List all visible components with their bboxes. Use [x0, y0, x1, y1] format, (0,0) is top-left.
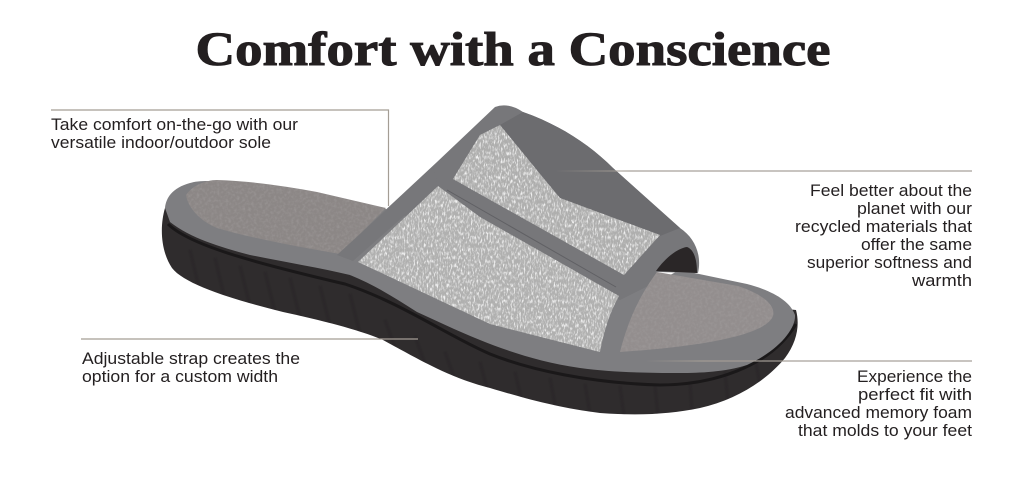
callout: recycled materials: planet with our: [857, 199, 972, 218]
callout text: Feel better about the: [810, 181, 972, 200]
callout: memory foam: that molds to your feet: [798, 421, 972, 440]
sole ribs: [196, 284, 761, 414]
callout: recycled materials: recycled materials that: [795, 217, 972, 236]
callout: recycled materials: offer the same: [861, 235, 972, 254]
strap heather flap: [450, 122, 665, 278]
callout: outdoor sole: [51, 110, 388, 206]
callout: adjustable strap: option for a custom width: [82, 367, 278, 386]
slipper sole: [162, 200, 798, 414]
leader line: [555, 170, 972, 172]
callout: outdoor sole: versatile indoor/outdoor sole: [51, 133, 271, 152]
rim binding: [165, 181, 795, 373]
callout: adjustable strap: [81, 339, 418, 386]
footbed heel terry: [186, 180, 386, 254]
callout: memory foam: advanced memory foam: [785, 403, 972, 422]
sole welt: [168, 224, 796, 385]
leader line: [81, 338, 418, 340]
infographic: [51, 30, 972, 440]
callout: recycled materials: superior softness and: [807, 253, 972, 272]
upper base silhouette: [337, 105, 699, 352]
leader line: [645, 360, 972, 362]
title: Comfort with a Conscience: [196, 23, 830, 76]
upper heather panel: [358, 186, 619, 352]
callout: memory foam: perfect fit with: [858, 385, 972, 404]
callout text: Adjustable strap creates the: [82, 349, 300, 368]
leader line: [51, 110, 388, 206]
callout text: Experience the: [857, 367, 972, 386]
callout text: Take comfort on-the-go with our: [51, 115, 298, 134]
callout: memory foam: [645, 360, 972, 440]
strap piping seam: [447, 190, 616, 287]
footbed toe terry: [620, 272, 774, 352]
side binding left: [337, 167, 438, 261]
toe opening shadow: [656, 247, 697, 273]
callout: recycled materials: [555, 170, 972, 290]
callout: recycled materials: warmth: [911, 271, 972, 290]
slipper illustration: [162, 105, 798, 416]
strap dark fabric: [500, 112, 680, 236]
